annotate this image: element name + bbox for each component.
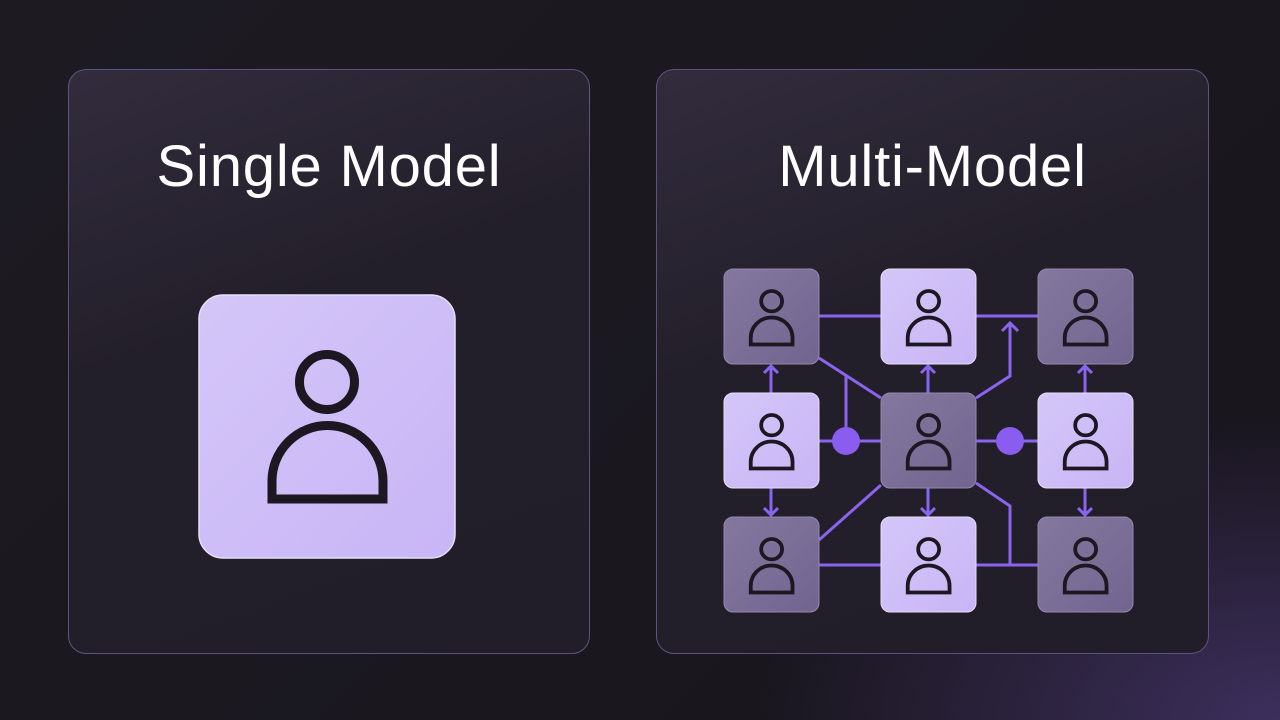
panel: single model: [68, 69, 590, 654]
node grid: [724, 269, 1133, 612]
connector lines: [764, 316, 1092, 565]
panel: multi-model: [656, 69, 1209, 654]
icon: large person box: [199, 295, 455, 558]
heading: single model: Single Model: [157, 134, 501, 199]
heading: multi-model: Multi-Model: [778, 134, 1087, 199]
connector dots: [832, 427, 1024, 455]
